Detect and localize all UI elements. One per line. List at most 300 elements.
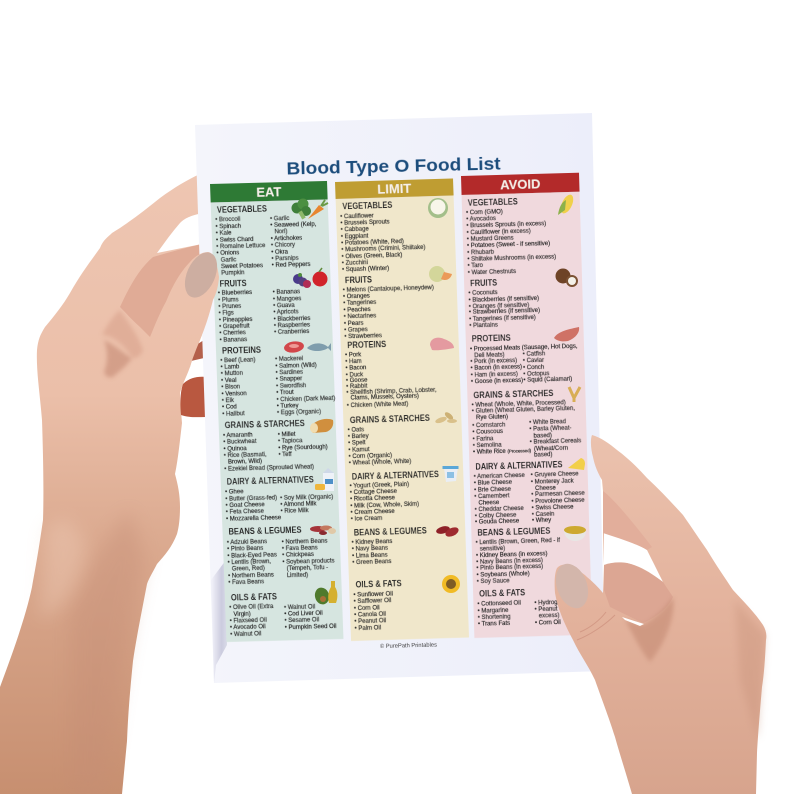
- limit: vegetables: VEGETABLES: [342, 200, 393, 211]
- avoid: grains and starches: • Breakfast Cereals: [530, 438, 581, 446]
- avoid: vegetables: • Brussels Sprouts (in excess): [466, 221, 546, 230]
- icon: corn: [558, 193, 576, 215]
- limit: beans and legumes: BEANS & LEGUMES: [354, 525, 427, 538]
- avoid: grains and starches: (Wheat/Corn: [534, 445, 568, 452]
- eat: fruits: • Grapefruit: [219, 323, 250, 330]
- limit: vegetables: • Squash (Winter): [342, 266, 389, 274]
- eat: proteins: • Elk: [222, 398, 235, 404]
- panel: limit column: [335, 178, 469, 641]
- limit: grains and starches: • Kamut: [348, 447, 370, 454]
- copyright footer: © PurePath Printables: [380, 642, 437, 650]
- limit: oils and fats: • Palm Oil: [355, 625, 381, 632]
- avoid: grains and starches: • White Bread: [529, 419, 566, 426]
- limit: grains and starches: GRAINS & STARCHES: [350, 413, 430, 425]
- left thumb over the sheet: [150, 247, 224, 367]
- avoid: proteins: • Catfish: [523, 351, 545, 358]
- eat: grains and starches: • Ezekiel Bread (Sprouted Wheat): [224, 464, 314, 473]
- eat: oils and fats: • Cod Liver Oil: [284, 611, 323, 618]
- eat header: [210, 181, 328, 202]
- eat: oils and fats: • Pumpkin Seed Oil: [285, 624, 337, 631]
- avoid: fruits: [468, 277, 541, 329]
- eat: vegetables: • Garlic: [270, 216, 290, 222]
- avoid: vegetables: [466, 195, 557, 276]
- eat: dairy and alternatives: • Feta Cheese: [226, 509, 265, 516]
- limit: vegetables: • Eggplant: [341, 233, 369, 240]
- eat: dairy and alternatives: • Rice Milk: [280, 508, 310, 515]
- avoid: vegetables: • Mustard Greens: [467, 236, 514, 243]
- avoid header: AVOID: [500, 176, 541, 192]
- eat: vegetables: • Chicory: [271, 242, 295, 249]
- limit: proteins: • Rabbit: [346, 384, 368, 390]
- limit: grains and starches: • Barley: [348, 434, 369, 440]
- avoid: dairy and alternatives: • Colby Cheese: [475, 512, 517, 520]
- limit: vegetables: • Potatoes (White, Red): [341, 239, 404, 247]
- limit: beans and legumes: • Navy Beans: [352, 546, 388, 553]
- limit: fruits: [342, 272, 436, 340]
- avoid: fruits: FRUITS: [470, 278, 497, 289]
- avoid: beans and legumes: • Kidney Beans (in excess): [476, 551, 548, 559]
- panel: eat column: [210, 181, 344, 642]
- eat: grains and starches: • Quinoa: [223, 446, 247, 453]
- eat: grains and starches: • Millet: [278, 432, 296, 438]
- eat: vegetables: • Kale: [216, 231, 232, 237]
- eat: grains and starches: • Rice (Basmati,: [224, 452, 267, 459]
- avoid: oils and fats: [477, 585, 589, 628]
- limit: fruits: • Pears: [344, 320, 364, 327]
- eat: dairy and alternatives: DAIRY & ALTERNATIVES: [227, 475, 314, 487]
- limit: dairy and alternatives: • Ricotta Cheese: [350, 496, 396, 503]
- limit: beans and legumes: [351, 525, 428, 566]
- limit: fruits: • Melons (Cantaloupe, Honeydew): [343, 285, 434, 294]
- avoid: dairy and alternatives: • Brie Cheese: [474, 487, 512, 494]
- eat: proteins: • Chicken (Dark Meat): [276, 396, 335, 403]
- avoid: oils and fats: • Trans Fats: [478, 621, 510, 628]
- right hand: [550, 435, 766, 794]
- avoid: vegetables: • Shiitake Mushrooms (in excess): [467, 254, 556, 263]
- avoid: dairy and alternatives: • Swiss Cheese: [532, 505, 574, 512]
- avoid: grains and starches: • Farina: [473, 436, 494, 443]
- avoid: grains and starches: • Wheat (Whole, White, Processed): [472, 400, 566, 409]
- limit: oils and fats: • Peanut Oil: [354, 618, 386, 625]
- eat: fruits: • Bananas: [220, 337, 247, 344]
- left hand and forearm: [0, 174, 219, 794]
- eat: grains and starches: Brown, Wild): [228, 459, 262, 466]
- back-of-hand shading: [735, 600, 765, 740]
- eat: vegetables: • Broccoli: [215, 217, 241, 224]
- eat: beans and legumes: • Northern Beans: [228, 572, 274, 580]
- avoid: fruits: • Plantains: [469, 322, 498, 329]
- icon: milk carton and butter: [315, 468, 334, 491]
- eat: beans and legumes: • Fava Beans: [282, 545, 318, 552]
- limit: proteins: • Goose: [346, 378, 368, 384]
- eat: fruits: • Plums: [218, 297, 239, 304]
- eat: beans and legumes: [226, 524, 335, 586]
- avoid: grains and starches: based): [534, 452, 553, 459]
- eat: oils and fats: • Flaxseed Oil: [230, 618, 267, 625]
- icon: avocado and oil bottle: [313, 581, 337, 606]
- eat: proteins: • Cod: [222, 405, 237, 411]
- eat: grains and starches: • Buckwheat: [223, 439, 257, 446]
- limit: beans and legumes: • Green Beans: [352, 559, 392, 566]
- limit: dairy and alternatives: • Yogurt (Greek, Plain): [350, 482, 409, 490]
- eat: beans and legumes: Green, Red): [232, 566, 265, 573]
- avoid: dairy and alternatives: • Camembert: [474, 493, 510, 500]
- avoid: dairy and alternatives: • Cheddar Cheese: [475, 506, 525, 513]
- avoid: dairy and alternatives: DAIRY & ALTERNATIVES: [475, 459, 563, 472]
- limit: proteins: [345, 337, 437, 409]
- sheet of paper: [195, 113, 605, 683]
- icon: soup bowl: [564, 526, 586, 541]
- limit: fruits: FRUITS: [345, 274, 372, 285]
- avoid: fruits: • Coconuts: [468, 290, 498, 297]
- eat: fruits: • Pineapples: [219, 317, 252, 324]
- eat: vegetables: • Okra: [271, 249, 289, 256]
- eat: beans and legumes: • Black-Eyed Peas: [227, 552, 277, 560]
- eat: proteins: • Halibut: [222, 411, 245, 418]
- eat: beans and legumes: • Adzuki Beans: [227, 539, 267, 546]
- limit: dairy and alternatives: • Ice Cream: [351, 516, 382, 523]
- middle finger: [603, 491, 652, 550]
- icon: cauliflower: [428, 198, 448, 218]
- eat: fruits: • Cherries: [219, 330, 246, 337]
- eat: proteins: • Turkey: [277, 403, 299, 410]
- limit: proteins: • Duck: [346, 372, 364, 379]
- avoid: vegetables: • Corn (GMO): [466, 209, 503, 216]
- avoid: proteins: Deli Meats): [474, 352, 505, 359]
- icon: pork cut: [430, 338, 454, 350]
- eat: beans and legumes: Limited): [287, 572, 308, 579]
- avoid: proteins: PROTEINS: [472, 332, 511, 344]
- eat: dairy and alternatives: • Goat Cheese: [225, 502, 265, 509]
- limit: vegetables: • Zucchini: [342, 260, 368, 267]
- avoid: dairy and alternatives: • Monterey Jack: [531, 478, 575, 485]
- gap between middle and ring fingers: [604, 533, 663, 582]
- avoid: proteins: • Octopus: [523, 371, 550, 378]
- eat: oils and fats: • Avocado Oil: [230, 624, 266, 631]
- panel: avoid column: [461, 173, 592, 638]
- limit: grains and starches: [347, 413, 431, 467]
- avoid: oils and fats: • Peanut Oil (in: [535, 606, 575, 613]
- avoid: dairy and alternatives: • Gruyere Cheese: [531, 471, 579, 479]
- avoid: dairy and alternatives: [473, 459, 586, 526]
- limit: proteins: • Bacon: [345, 365, 366, 372]
- eat: proteins: • Snapper: [276, 376, 302, 383]
- eat: dairy and alternatives: • Mozzarella Cheese: [226, 515, 282, 523]
- avoid: dairy and alternatives: Cheese: [535, 485, 557, 492]
- eat: vegetables: • Romaine Lettuce: [216, 243, 266, 250]
- eat: proteins: • Beef (Lean): [220, 357, 256, 364]
- avoid: dairy and alternatives: • Provolone Cheese: [531, 497, 585, 505]
- eat: fruits: [217, 276, 311, 344]
- eat: oils and fats: • Olive Oil (Extra: [229, 604, 274, 611]
- limit header: LIMIT: [377, 181, 412, 197]
- eat: vegetables: • Artichokes: [271, 236, 302, 242]
- limit: proteins: • Ham: [345, 359, 362, 365]
- eat: proteins: • Eggs (Organic): [277, 409, 321, 416]
- avoid: oils and fats: • Corn Oil: [535, 620, 561, 626]
- avoid: fruits: • Strawberries (if sensitive): [469, 308, 540, 316]
- eat: fruits: • Prunes: [218, 304, 241, 310]
- eat: proteins: • Bison: [221, 384, 240, 391]
- limit header: [335, 178, 454, 199]
- eat: fruits: FRUITS: [219, 278, 247, 289]
- eat: oils and fats: • Walnut Oil: [230, 631, 262, 638]
- eat: fruits: • Raspberries: [274, 322, 310, 329]
- icon: melon: [429, 266, 452, 282]
- limit: grains and starches: • Spelt: [348, 440, 366, 447]
- eat: vegetables: • Red Peppers: [272, 262, 311, 269]
- eat: vegetables: Garlic: [221, 257, 237, 264]
- eat: beans and legumes: • Pinto Beans: [227, 546, 263, 553]
- avoid: vegetables: • Water Chestnuts: [468, 269, 516, 276]
- title: Blood Type O Food List: [286, 153, 501, 178]
- eat: vegetables: [215, 202, 318, 277]
- eat: proteins: • Sardines: [275, 370, 303, 376]
- avoid: oils and fats: • Margarine: [478, 608, 509, 615]
- avoid: beans and legumes: • Soy Sauce: [477, 578, 510, 585]
- avoid: oils and fats: excess): [539, 613, 560, 620]
- finger tip behind the sheet: [180, 377, 206, 417]
- avoid: dairy and alternatives: Cheese: [478, 500, 500, 506]
- eat: beans and legumes: • Northern Beans: [282, 538, 328, 546]
- eat header: EAT: [256, 184, 282, 200]
- avoid: proteins: • Processed Meats (Sausage, Hot Dogs,: [470, 344, 578, 353]
- limit: dairy and alternatives: • Milk (Cow, Whole, Skim): [350, 502, 419, 510]
- icon: berries and apple: [293, 268, 328, 288]
- eat: beans and legumes: BEANS & LEGUMES: [228, 525, 302, 537]
- avoid: beans and legumes: BEANS & LEGUMES: [477, 526, 550, 538]
- limit: fruits: • Oranges: [343, 293, 370, 300]
- avoid: beans and legumes: • Pinto Beans (in excess): [476, 564, 543, 572]
- avoid: proteins: • Pork (in excess): [470, 358, 517, 365]
- icon: broccoli and carrot: [292, 198, 328, 219]
- eat: fruits: • Apricots: [273, 309, 299, 316]
- eat: proteins: • Mackerel: [275, 356, 303, 363]
- icon: mixed beans: [310, 526, 336, 535]
- web shading between thumb and fingers: [104, 340, 132, 377]
- avoid: beans and legumes: sensitive): [480, 546, 505, 552]
- avoid: beans and legumes: • Lentils (Brown, Green, Red - if: [476, 538, 561, 546]
- avoid: dairy and alternatives: • Gouda Cheese: [475, 518, 520, 526]
- avoid: dairy and alternatives: • Whey: [532, 518, 551, 524]
- limit: oils and fats: • Sunflower Oil: [353, 591, 393, 599]
- limit: oils and fats: • Canola Oil: [354, 612, 386, 619]
- eat: vegetables: Nori): [274, 229, 288, 236]
- avoid: proteins: • Squid (Calamari): [523, 376, 572, 384]
- avoid: fruits: • Oranges (if sensitive): [469, 303, 529, 310]
- limit: fruits: • Tangerines: [343, 300, 376, 307]
- eat: beans and legumes: • Chickpeas: [282, 552, 314, 559]
- avoid: grains and starches: • Couscous: [472, 429, 503, 436]
- limit: oils and fats: • Corn Oil: [354, 605, 380, 612]
- avoid: oils and fats: • Shortening: [478, 614, 511, 621]
- eat: proteins: • Salmon (Wild): [275, 363, 317, 370]
- avoid: fruits: • Blackberries (if sensitive): [469, 296, 539, 304]
- eat: vegetables: Sweet Potatoes: [221, 263, 263, 270]
- avoid: dairy and alternatives: • Parmesan Cheese: [531, 491, 585, 498]
- limit: vegetables: • Olives (Green, Black): [342, 252, 403, 260]
- limit: dairy and alternatives: • Cottage Cheese: [350, 489, 398, 496]
- thumb gap: [622, 617, 644, 626]
- eat: oils and fats: • Sesame Oil: [284, 617, 319, 624]
- eat: proteins: • Mutton: [221, 371, 243, 377]
- eat: vegetables: • Spinach: [215, 224, 241, 230]
- icon: bread loaf: [310, 419, 333, 433]
- icon: yogurt cup: [442, 466, 458, 482]
- avoid: proteins: • Conch: [523, 365, 544, 371]
- eat: vegetables: Pumpkin: [221, 270, 245, 277]
- limit: vegetables: [340, 199, 426, 274]
- eat: proteins: • Lamb: [221, 364, 240, 371]
- eat: grains and starches: • Tapioca: [278, 438, 303, 445]
- eat: fruits: • Figs: [219, 311, 234, 317]
- eat: beans and legumes: • Fava Beans: [228, 579, 264, 586]
- avoid: vegetables: • Rhubarb: [467, 250, 495, 256]
- avoid: grains and starches: • Semolina: [473, 442, 502, 449]
- eat: dairy and alternatives: • Butter (Grass-fed): [225, 495, 277, 503]
- avoid: oils and fats: OILS & FATS: [479, 587, 525, 599]
- eat: proteins: • Venison: [221, 391, 247, 398]
- icon: grains: [435, 411, 457, 424]
- eat: grains and starches: [223, 417, 329, 473]
- limit: proteins: Clams, Mussels, Oysters): [350, 394, 419, 402]
- limit: proteins: • Shellfish (Shrimp, Crab, Lobster,: [346, 387, 437, 396]
- thumb crease: [577, 612, 615, 640]
- icon: wheat: [569, 387, 580, 402]
- limit: grains and starches: • Oats: [348, 427, 364, 434]
- eat: oils and fats: Virgin): [233, 611, 251, 618]
- avoid: grains and starches: • White Rice (Processed): [473, 448, 531, 456]
- ring finger: [604, 562, 673, 623]
- limit: proteins: • Pork: [345, 352, 362, 359]
- eat: fruits: • Guava: [273, 303, 295, 309]
- avoid: dairy and alternatives: • Blue Cheese: [474, 480, 513, 487]
- avoid: proteins: • Caviar: [523, 358, 544, 364]
- icon: cheese: [568, 458, 585, 470]
- avoid: beans and legumes: • Soybeans (Whole): [477, 571, 530, 579]
- icon: kidney beans: [435, 525, 460, 539]
- limit: dairy and alternatives: DAIRY & ALTERNATIVES: [352, 469, 439, 482]
- avoid: grains and starches: • Cornstarch: [472, 422, 505, 429]
- second finger behind the sheet: [120, 244, 205, 337]
- eat: beans and legumes: • Soybean products: [282, 558, 335, 566]
- eat: grains and starches: GRAINS & STARCHES: [225, 418, 305, 430]
- limit: proteins: PROTEINS: [347, 339, 386, 350]
- avoid: fruits: • Tangerines (if sensitive): [469, 315, 536, 323]
- finger sliver behind the sheet: [191, 340, 204, 361]
- avoid: proteins: • Goose (in excess): [471, 378, 523, 385]
- avoid: dairy and alternatives: • American Cheese: [474, 473, 526, 480]
- avoid: vegetables: VEGETABLES: [468, 196, 518, 208]
- limit: beans and legumes: • Lima Beans: [352, 553, 388, 560]
- limit: fruits: • Nectarines: [344, 313, 376, 320]
- limit: grains and starches: • Wheat (Whole, White): [349, 459, 411, 467]
- icon: sliced ham: [554, 327, 579, 341]
- eat: beans and legumes: • Lentils (Brown,: [228, 559, 272, 566]
- limit: vegetables: • Mushrooms (Crimini, Shiitake): [341, 245, 426, 254]
- limit: vegetables: • Cauliflower: [340, 213, 374, 220]
- eat: proteins: PROTEINS: [222, 345, 261, 356]
- eat: grains and starches: • Rye (Sourdough): [278, 444, 328, 452]
- eat: vegetables: VEGETABLES: [217, 204, 267, 215]
- avoid: grains and starches: GRAINS & STARCHES: [473, 388, 554, 400]
- avoid: beans and legumes: [475, 526, 562, 585]
- avoid: vegetables: • Avocados: [466, 216, 496, 223]
- eat: fruits: • Bananas: [273, 289, 300, 296]
- avoid: grains and starches: • Gluten (Wheat Gluten, Barley Gluten,: [472, 406, 575, 415]
- eat: proteins: [220, 343, 336, 418]
- limit: fruits: • Grapes: [344, 327, 368, 334]
- limit: dairy and alternatives: • Cream Cheese: [350, 509, 395, 516]
- avoid: grains and starches: [471, 387, 582, 460]
- limit: oils and fats: [353, 578, 403, 632]
- eat: fruits: • Cranberries: [274, 329, 309, 336]
- limit: beans and legumes: • Kidney Beans: [352, 539, 393, 546]
- eat: fruits: • Blueberries: [218, 290, 252, 297]
- avoid: proteins: • Ham (in excess): [471, 371, 518, 379]
- limit: vegetables: • Brussels Sprouts: [340, 219, 390, 227]
- avoid: proteins: [470, 331, 579, 385]
- eat: oils and fats: OILS & FATS: [231, 591, 277, 603]
- avoid: oils and fats: • Cottonseed Oil: [477, 600, 521, 608]
- icon: steak and fish: [283, 340, 331, 354]
- limit: oils and fats: • Safflower Oil: [354, 598, 391, 605]
- eat: oils and fats: [229, 590, 337, 638]
- eat: grains and starches: • Teff: [278, 452, 292, 458]
- avoid: grains and starches: Rye Gluten): [476, 414, 508, 421]
- avoid: grains and starches: based): [534, 433, 552, 439]
- limit: oils and fats: OILS & FATS: [355, 578, 402, 590]
- icon: coconut: [556, 268, 578, 287]
- icon: sunflower: [442, 575, 460, 593]
- avoid: vegetables: • Potatoes (Sweet - if sensitive): [467, 241, 550, 250]
- eat: fruits: • Blackberries: [274, 316, 311, 323]
- limit: dairy and alternatives: [349, 469, 440, 523]
- eat: proteins: • Veal: [221, 378, 237, 384]
- avoid: vegetables: • Taro: [468, 263, 484, 270]
- avoid: vegetables: • Cauliflower (in excess): [467, 228, 531, 236]
- avoid: proteins: • Bacon (in excess): [471, 364, 522, 372]
- eat: dairy and alternatives: • Ghee: [225, 489, 244, 496]
- eat: dairy and alternatives: • Almond Milk: [280, 501, 318, 508]
- eat: dairy and alternatives: • Soy Milk (Organic): [280, 494, 333, 502]
- avoid: oils and fats: • Hydrogenated Oils: [534, 599, 588, 606]
- palm crease shading: [625, 597, 674, 662]
- limit: grains and starches: • Corn (Organic): [349, 453, 392, 460]
- eat: beans and legumes: (Tempeh, Tofu -: [287, 565, 328, 572]
- avoid: dairy and alternatives: • Casein: [532, 512, 554, 518]
- limit: fruits: • Strawberries: [344, 333, 382, 340]
- eat: proteins: • Trout: [276, 390, 294, 396]
- eat: vegetables: • Onions: [216, 250, 239, 257]
- eat: fruits: • Mangoes: [273, 296, 301, 303]
- right thumb nail: [550, 559, 594, 613]
- eat: proteins: • Swordfish: [276, 383, 306, 390]
- limit: vegetables: • Cabbage: [341, 227, 370, 234]
- limit: proteins: • Chicken (White Meat): [347, 401, 408, 409]
- eat: vegetables: • Swiss Chard: [216, 237, 254, 244]
- eat: oils and fats: • Walnut Oil: [284, 604, 315, 611]
- limit: fruits: • Peaches: [343, 307, 371, 314]
- eat: grains and starches: • Amaranth: [223, 432, 253, 439]
- eat: vegetables: • Seaweed (Kelp,: [270, 222, 317, 229]
- eat: vegetables: • Parsnips: [271, 256, 299, 262]
- thumb nail: [178, 247, 224, 303]
- avoid header: [461, 173, 580, 195]
- avoid: grains and starches: • Pasta (Wheat-: [529, 426, 572, 433]
- eat: dairy and alternatives: [225, 474, 334, 523]
- avoid: beans and legumes: • Navy Beans (in excess): [476, 558, 543, 566]
